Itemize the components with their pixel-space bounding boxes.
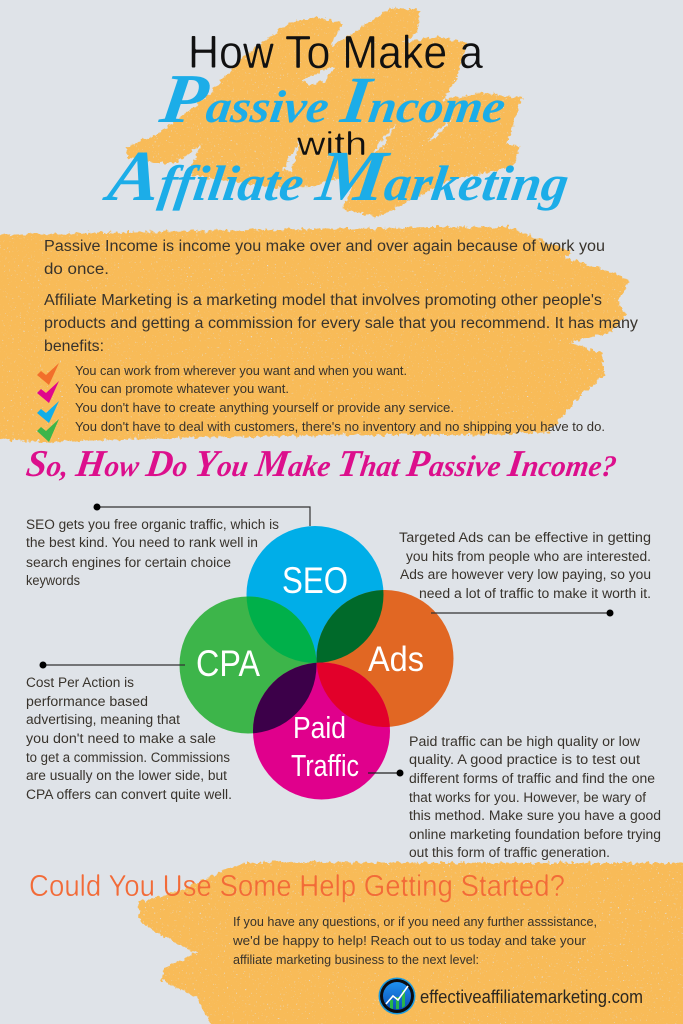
label: Traffic: Traffic [291,748,359,783]
definition: affiliate marketing: Affiliate Marketing is a marketing model that involves promoting other people's [44,292,602,309]
logo icon [378,978,416,1014]
text: Paid Traffic description: that works for you. However, be wary of [409,790,646,805]
brush stroke: intro panel [0,227,629,442]
callout: Ads [399,530,651,616]
circle: SEO [246,526,384,663]
icon: orange check [37,363,59,385]
title line: Affiliate Marketing: Affiliate Marketing [100,136,575,216]
label: Paid: Paid [293,710,346,745]
callout: Paid Traffic [368,734,661,860]
text: Paid Traffic description: out this form of traffic generation. [409,845,610,860]
circle: Paid Traffic [253,662,390,800]
text: Paid Traffic description: online marketing foundation before trying [409,827,661,842]
callout: CPA [26,662,232,802]
footer text: we'd be happy to help! Reach out to us today and take your [232,934,586,948]
title line: Passive Income: Passive Income [155,60,512,138]
circle: Ads [316,590,454,727]
text: Paid Traffic description [409,734,661,860]
title [100,26,575,216]
text: Ads description: need a lot of traffic to make it worth it. [419,586,651,601]
text: CPA description: you don't need to make a sale [26,731,216,746]
text: SEO description: search engines for certain choice [26,555,231,570]
icon: blue check [37,401,59,423]
label: Ads: Ads [368,640,424,679]
callout: SEO [26,504,310,588]
benefit 2: You can promote whatever you want. [75,382,289,396]
footer text: If you have any questions, or if you need any further asssistance, [233,915,597,929]
brush stroke: footer panel [139,862,683,1024]
text: Paid Traffic description: different forms of traffic and find the one [409,771,655,786]
leader line: CPA [40,662,185,668]
leader line: Paid Traffic [368,770,404,776]
text: CPA description: Cost Per Action is [26,675,134,690]
text: Paid Traffic description: this method. Make sure you have a good [409,808,661,823]
footer heading: Could You Use Some Help Getting Started? [29,868,565,903]
text: SEO description: keywords [26,573,80,588]
text: Ads description: Ads are however very low paying, so you [400,567,651,582]
leader line: Ads [431,610,614,616]
definition: passive income line 2: do once. [44,261,109,278]
website address: effectiveaffiliatemarketing.com [420,987,643,1007]
text: SEO description: SEO gets you free organic traffic, which is [26,517,279,532]
title line: with: with [296,125,367,162]
overlap: SEO and CPA [246,596,316,663]
overlap: CPA and Paid [253,662,316,734]
text: SEO description [26,517,279,588]
icon: green check [37,419,59,442]
venn diagram [180,526,454,800]
section heading: So, How Do You Make That Passive Income? [24,443,620,485]
title line: How To Make a: How To Make a [188,26,483,78]
text: Paid Traffic description: Paid traffic can be high quality or low [409,734,640,749]
label: CPA: CPA [196,643,260,684]
text: CPA description: are usually on the lower side, but [26,768,227,783]
benefit 3: You don't have to create anything yourself or provide any service. [75,401,454,415]
circle: CPA [180,596,316,734]
label: SEO: SEO [282,560,348,601]
overlap: Ads and Paid [316,662,390,727]
footer text [232,915,597,967]
benefits checklist [37,363,605,442]
text: CPA description: advertising, meaning that [26,712,180,727]
definition: affiliate marketing line 2: products and getting a commission for every sale that you recommend. It has many [44,315,638,332]
text: Ads description [399,530,651,601]
text: Ads description: you hits from people who are interested. [406,549,651,564]
text: CPA description: CPA offers can convert quite well. [26,787,232,802]
leader line: SEO [94,504,310,526]
definition: passive income: Passive Income is income you make over and over again because of work you [44,238,605,255]
text: CPA description: performance based [26,694,148,709]
intro text [44,238,638,355]
text: SEO description: the best kind. You need to rank well in [26,535,258,550]
text: CPA description: to get a commission. Commissions [26,750,230,765]
icon: pink check [37,381,59,403]
brush stroke: title [127,8,522,217]
text: Paid Traffic description: quality. A good practice is to test out [409,752,640,767]
text: CPA description [26,675,232,802]
benefit 4: You don't have to deal with customers, there's no inventory and no shipping you have to do. [75,420,605,434]
footer text: affiliate marketing business to the next level: [233,953,479,967]
text: Ads description: Targeted Ads can be effective in getting [399,530,651,545]
benefit 1: You can work from wherever you want and when you want. [75,364,407,378]
overlap: SEO and Ads [316,590,384,663]
definition: affiliate marketing line 3: benefits: [44,338,104,355]
